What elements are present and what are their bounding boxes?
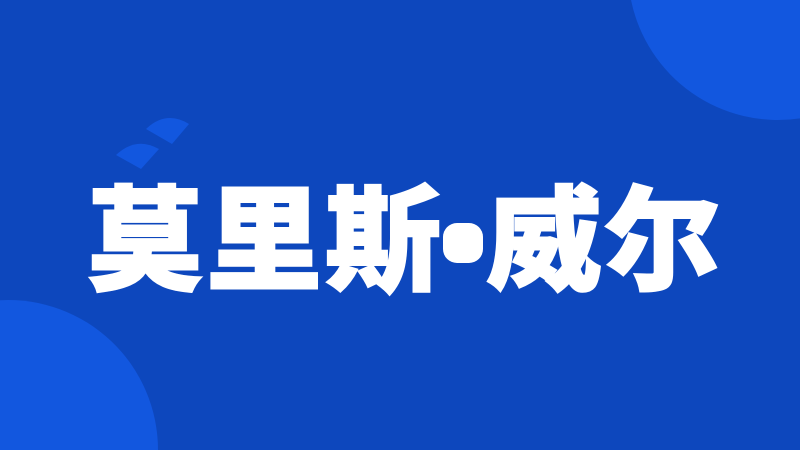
title: •: [459, 232, 466, 254]
decorative circle: top right: [631, 0, 800, 120]
title: 莫里斯: [87, 150, 444, 314]
title: 威尔: [486, 150, 722, 314]
icon: wifi-like logo: [116, 118, 189, 169]
decorative circle: bottom left: [0, 300, 158, 450]
title: [87, 150, 722, 314]
